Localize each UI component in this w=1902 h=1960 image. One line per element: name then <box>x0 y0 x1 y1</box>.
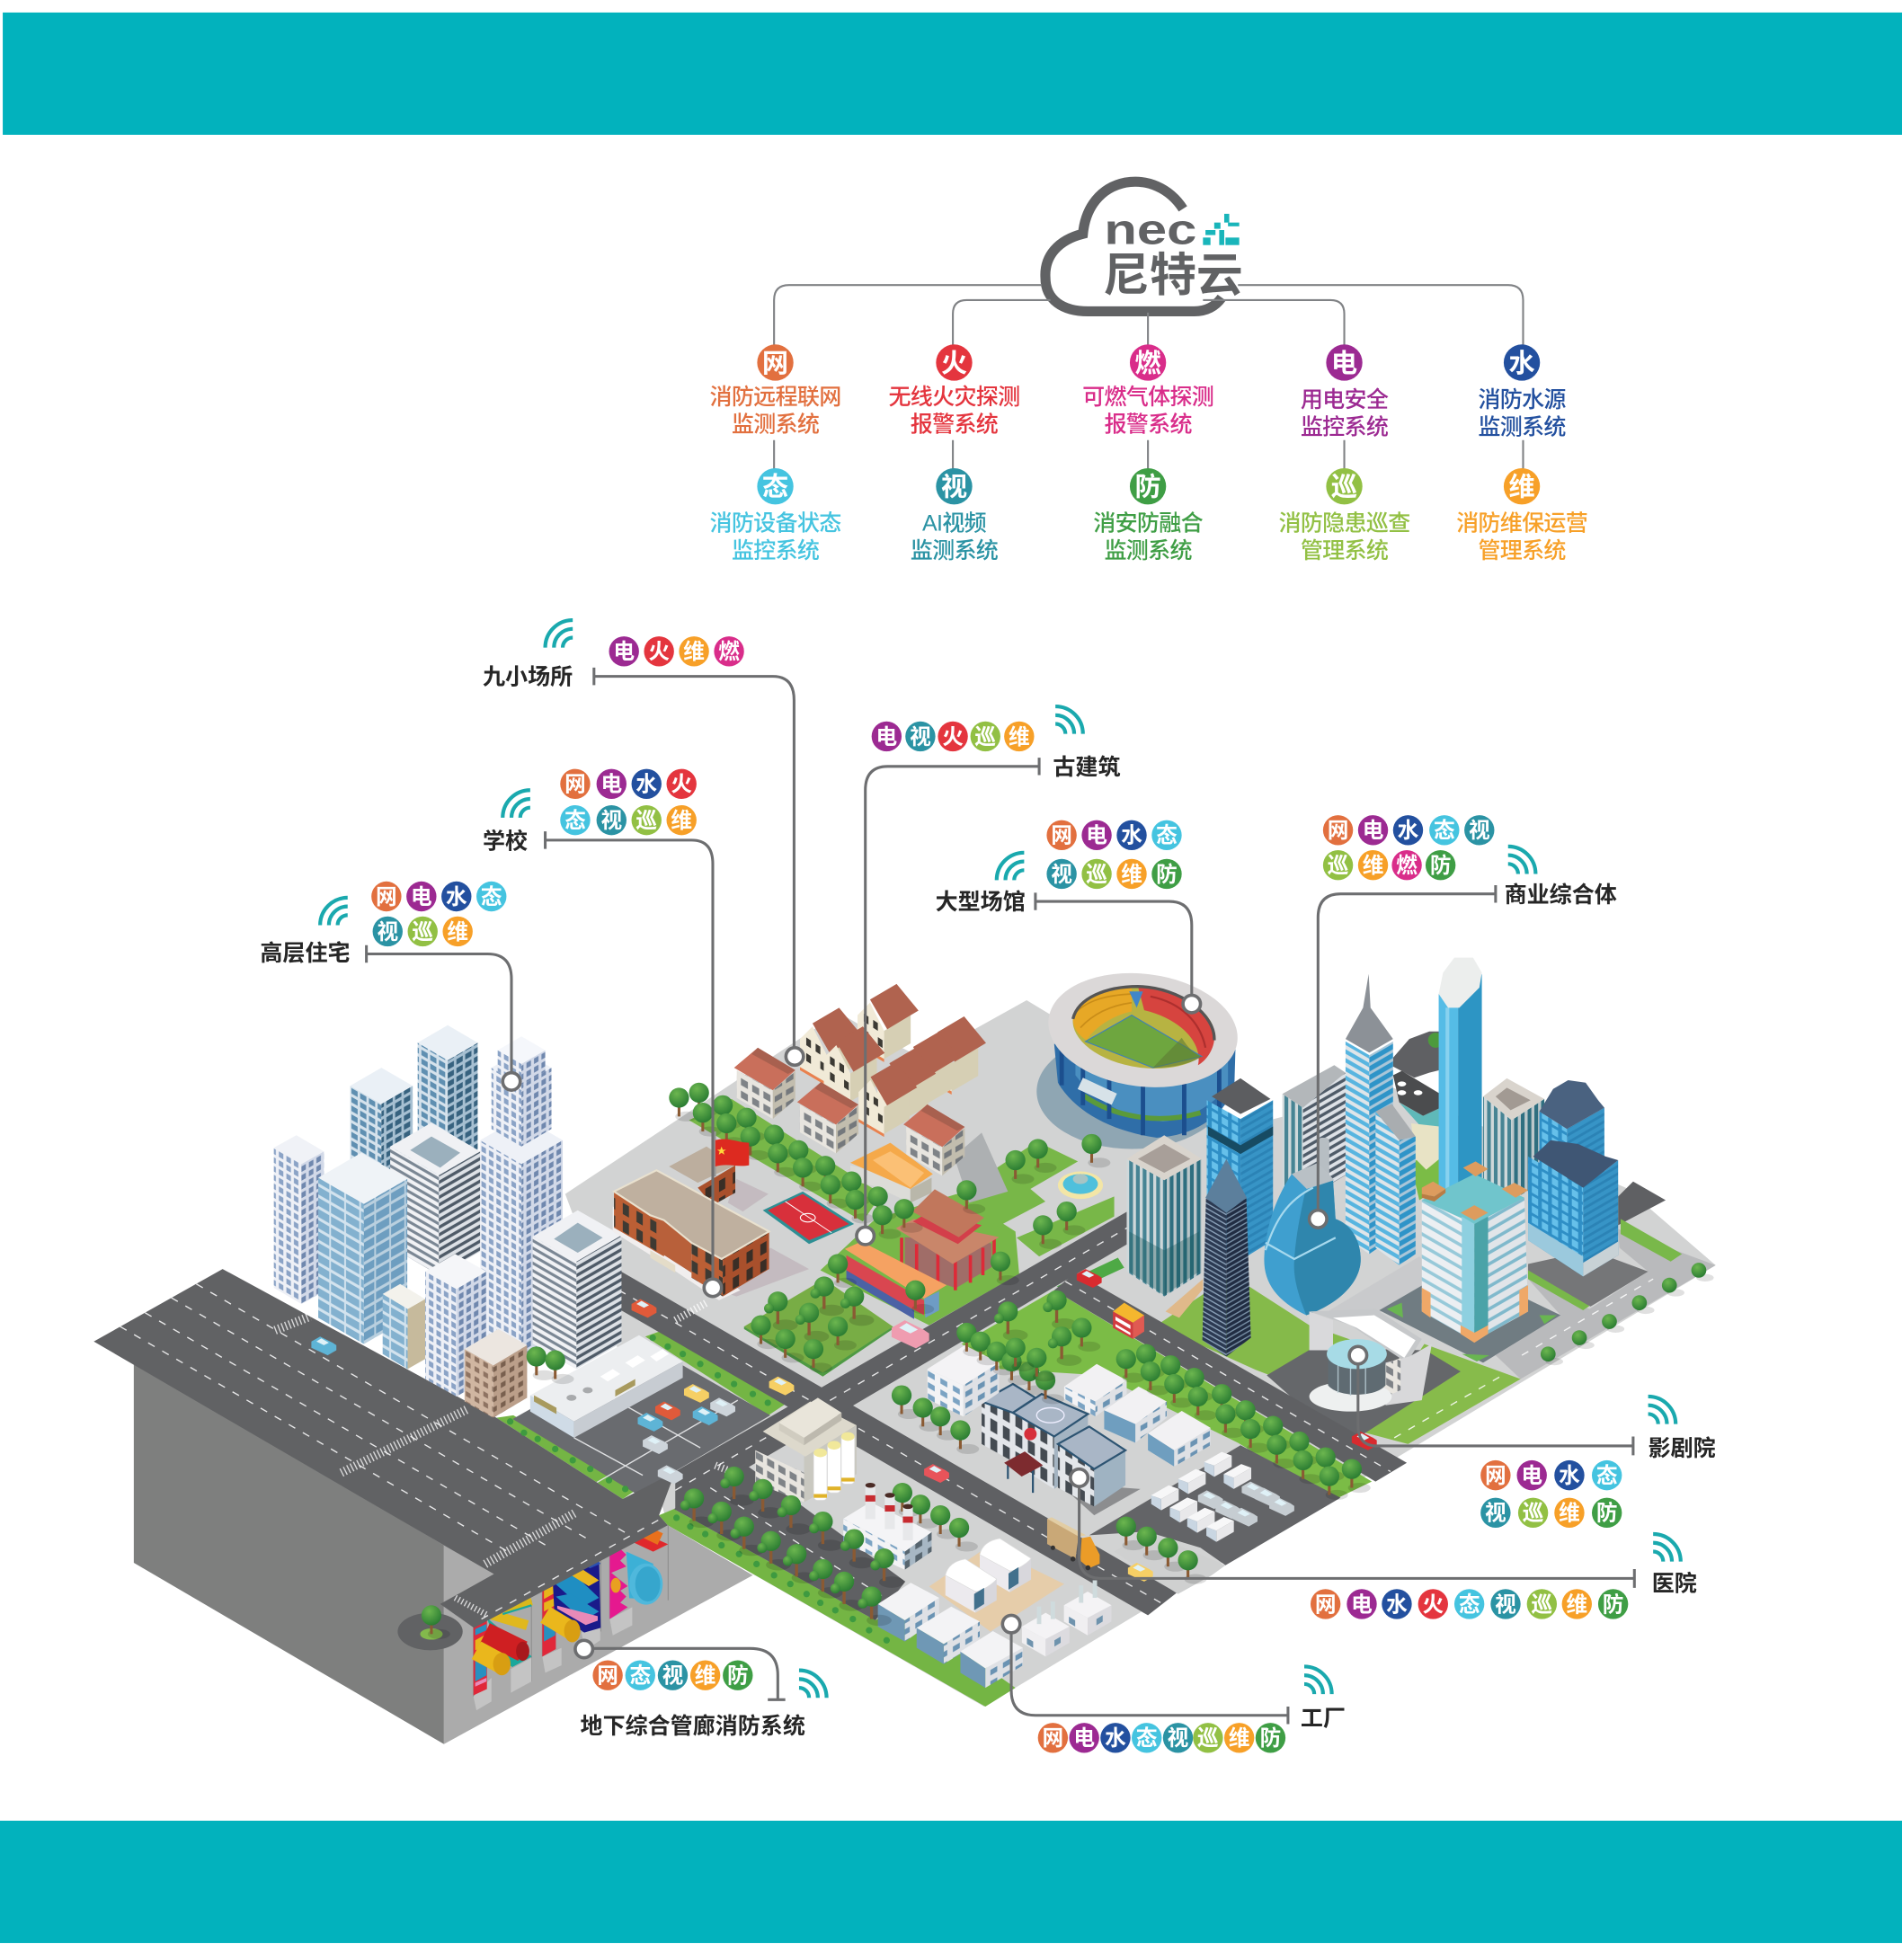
label group: 地下综合管廊消防系统: 态 <box>629 1664 651 1689</box>
orange house <box>850 1143 933 1202</box>
label group: 古建筑: 电 <box>876 725 898 749</box>
label group: 商业综合体: 商业综合体 <box>1505 882 1617 908</box>
hedges <box>507 1335 890 1644</box>
system: 消防远程联网监测系统: 监测系统 <box>732 412 820 438</box>
label group: 影剧院: 网 <box>1485 1465 1506 1488</box>
label group: 医院: 医院 <box>1652 1571 1697 1596</box>
system: 消防远程联网监测系统: 消防远程联网 <box>710 385 841 410</box>
label group: 商业综合体: 态 <box>1434 819 1455 843</box>
system: 消防设备状态监控系统: 监控系统 <box>732 538 820 563</box>
label group: 地下综合管廊消防系统: 维 <box>695 1664 715 1689</box>
label group: 学校 <box>483 769 697 855</box>
system: 消防隐患巡查管理系统: 消防隐患巡查 <box>1279 511 1410 537</box>
label group: 影剧院 <box>1480 1397 1716 1528</box>
label group: 九小场所: 电 <box>613 640 635 664</box>
stadium <box>1036 962 1244 1149</box>
underground utility tunnel block <box>134 1362 752 1744</box>
label group: 影剧院: 巡 <box>1523 1502 1544 1526</box>
system: 消防远程联网监测系统: 网 <box>762 350 788 378</box>
temple buildings <box>845 1189 1000 1319</box>
system: AI视频监测系统: 监测系统 <box>911 538 999 563</box>
label group: 古建筑: 巡 <box>974 725 996 749</box>
connector lines from cloud to systems <box>774 285 1523 469</box>
pipes in bay 1 <box>474 1601 532 1695</box>
system: AI视频监测系统 <box>911 468 999 563</box>
logo: 尼特云 cloud: nec <box>1104 206 1196 253</box>
label group: 地下综合管廊消防系统: 防 <box>727 1664 749 1689</box>
pipes in bay 2 <box>542 1555 600 1656</box>
callout: 地下综合管廊 <box>575 1640 786 1699</box>
label group: 古建筑 <box>872 706 1120 780</box>
system: 消防隐患巡查管理系统: 巡 <box>1331 473 1357 502</box>
label group: 学校: 巡 <box>635 809 657 833</box>
label group: 医院: 态 <box>1459 1592 1480 1617</box>
system: 可燃气体探测报警系统: 燃 <box>1135 349 1161 378</box>
system: 消防设备状态监控系统: 态 <box>762 473 788 502</box>
label group: 高层住宅: 高层住宅 <box>260 940 351 966</box>
system: 消防隐患巡查管理系统 <box>1279 468 1410 563</box>
system: 消防水源监测系统: 监测系统 <box>1478 414 1566 439</box>
hospital <box>982 1384 1125 1506</box>
factory with chimneys <box>843 1483 931 1570</box>
label group: 地下综合管廊消防系统: 视 <box>662 1664 684 1689</box>
label group: 影剧院: 维 <box>1559 1502 1580 1526</box>
label group: 影剧院: 水 <box>1559 1464 1580 1488</box>
system: 用电安全监控系统: 用电安全 <box>1301 387 1389 412</box>
label group: 医院: 水 <box>1386 1592 1408 1617</box>
label group: 商业综合体: 视 <box>1469 819 1490 843</box>
highway deck <box>93 1269 675 1650</box>
label group: 九小场所: 燃 <box>718 640 740 664</box>
label group: 工厂: 巡 <box>1197 1726 1219 1751</box>
label group: 高层住宅: 维 <box>447 920 468 945</box>
label group: 医院: 维 <box>1566 1592 1587 1617</box>
system: 无线火灾探测报警系统: 报警系统 <box>911 412 999 438</box>
system: 无线火灾探测报警系统 <box>888 344 1019 438</box>
logo: 尼特云 cloud: 尼特云 <box>1103 249 1243 301</box>
label group: 古建筑: 火 <box>942 726 964 749</box>
label group: 学校: 学校 <box>483 829 528 855</box>
label group: 医院: 网 <box>1315 1593 1336 1617</box>
label group: 大型场馆: 大型场馆 <box>936 890 1026 915</box>
system: 用电安全监控系统: 电 <box>1331 349 1357 378</box>
label group: 地下综合管廊消防系统: 地下综合管廊消防系统 <box>581 1714 805 1739</box>
label group: 商业综合体: 水 <box>1398 819 1419 843</box>
label group: 大型场馆: 巡 <box>1086 863 1107 887</box>
dark spire tower <box>1203 1159 1251 1356</box>
label group: 工厂: 视 <box>1168 1726 1189 1751</box>
label group: 学校: 水 <box>635 773 657 797</box>
label group: 工厂: 网 <box>1043 1727 1063 1751</box>
pipes in bay 3 <box>609 1528 668 1619</box>
label group: 工厂: 维 <box>1229 1726 1249 1751</box>
callout: 九小场所 <box>594 668 804 1065</box>
school <box>613 1147 769 1300</box>
label group: 大型场馆: 视 <box>1051 863 1072 887</box>
label group: 医院 <box>1311 1534 1697 1619</box>
system: 无线火灾探测报警系统: 无线火灾探测 <box>888 385 1019 410</box>
system: 消防维保运营管理系统: 消防维保运营 <box>1456 511 1587 537</box>
houses <box>734 984 986 1175</box>
label group: 医院: 巡 <box>1532 1592 1553 1617</box>
system: 消安防融合监测系统: 监测系统 <box>1104 538 1192 563</box>
label group: 古建筑: 古建筑 <box>1053 755 1120 780</box>
system: 消防设备状态监控系统: 消防设备状态 <box>710 511 841 537</box>
label group: 工厂: 防 <box>1260 1726 1281 1751</box>
label group: 影剧院: 电 <box>1521 1464 1542 1488</box>
label group: 大型场馆: 防 <box>1156 863 1178 887</box>
label group: 影剧院: 影剧院 <box>1649 1436 1716 1461</box>
top teal banner <box>3 13 1902 135</box>
system: 消防维保运营管理系统: 管理系统 <box>1478 538 1566 563</box>
label group: 高层住宅: 水 <box>446 885 467 909</box>
label group: 商业综合体: 燃 <box>1396 854 1418 878</box>
label group: 古建筑: 视 <box>910 725 931 749</box>
label group: 九小场所 <box>483 620 744 690</box>
bottom teal banner <box>0 1821 1902 1943</box>
label group: 高层住宅: 电 <box>411 885 432 909</box>
label group: 商业综合体: 维 <box>1363 854 1383 878</box>
label group: 影剧院: 防 <box>1596 1502 1618 1526</box>
label group: 工厂: 电 <box>1073 1726 1095 1751</box>
label group: 高层住宅: 网 <box>376 886 397 909</box>
system: 可燃气体探测报警系统: 可燃气体探测 <box>1082 385 1213 410</box>
system: 用电安全监控系统: 监控系统 <box>1301 414 1389 439</box>
white low-rise buildings <box>928 1345 1211 1467</box>
label group: 大型场馆: 网 <box>1051 825 1072 848</box>
opera house <box>1310 1309 1432 1412</box>
system: AI视频监测系统: AI视频 <box>922 511 987 537</box>
trees <box>527 1083 1714 1626</box>
system: 无线火灾探测报警系统: 火 <box>941 350 967 378</box>
label group: 工厂: 水 <box>1105 1726 1126 1751</box>
label group: 学校: 火 <box>671 774 692 797</box>
system: 用电安全监控系统 <box>1301 344 1389 439</box>
system: 可燃气体探测报警系统: 报警系统 <box>1104 412 1192 438</box>
label group: 学校: 维 <box>671 809 692 833</box>
label group: 学校: 态 <box>564 809 586 833</box>
label group: 工厂 <box>1038 1666 1346 1752</box>
callout: 古建筑 <box>857 758 1039 1245</box>
system: 消防远程联网监测系统 <box>710 344 841 438</box>
label group: 影剧院: 态 <box>1596 1464 1618 1488</box>
label group: 医院: 电 <box>1351 1592 1373 1617</box>
system: 消防水源监测系统 <box>1478 344 1566 439</box>
label group: 商业综合体: 防 <box>1430 854 1451 878</box>
label group: 学校: 电 <box>600 773 622 797</box>
label group: 古建筑: 维 <box>1009 725 1030 749</box>
label group: 医院: 视 <box>1495 1592 1516 1617</box>
label group: 大型场馆: 维 <box>1121 863 1142 887</box>
label group: 工厂: 工厂 <box>1301 1707 1346 1732</box>
trees behind chimney factory <box>893 1483 939 1529</box>
flag <box>714 1131 749 1176</box>
callout: 高层住宅 <box>367 945 520 1090</box>
label group: 商业综合体: 电 <box>1363 819 1384 843</box>
system: 消防设备状态监控系统 <box>710 468 841 563</box>
warehouses <box>878 1539 1111 1688</box>
high-rise residential cluster <box>274 1025 621 1418</box>
label group: 大型场馆: 态 <box>1156 824 1178 848</box>
callout: 商业综合体 <box>1310 885 1496 1228</box>
office tower with teal stripes <box>1126 1135 1202 1297</box>
callout: 医院 <box>1071 1469 1634 1588</box>
callout: 工厂 <box>1002 1615 1288 1724</box>
system: 消防水源监测系统: 消防水源 <box>1478 387 1566 412</box>
callout: 大型场馆 <box>1035 892 1201 1013</box>
label group: 九小场所: 维 <box>683 640 705 664</box>
system: 消安防融合监测系统: 防 <box>1135 473 1161 502</box>
system: AI视频监测系统: 视 <box>941 473 967 502</box>
label group: 九小场所: 火 <box>648 641 670 664</box>
label group: 大型场馆: 电 <box>1086 824 1107 848</box>
label group: 大型场馆: 水 <box>1121 824 1142 848</box>
parked delivery vans and cars <box>1151 1452 1294 1542</box>
label group: 大型场馆 <box>936 820 1182 915</box>
system: 可燃气体探测报警系统 <box>1082 344 1213 438</box>
label group: 医院: 火 <box>1422 1593 1444 1617</box>
label group: 商业综合体 <box>1323 815 1617 908</box>
label group: 高层住宅: 态 <box>481 885 502 909</box>
label group: 学校: 视 <box>600 809 622 833</box>
label group: 地下综合管廊消防系统: 网 <box>597 1665 618 1689</box>
label group: 医院: 防 <box>1603 1592 1623 1617</box>
label group: 高层住宅: 视 <box>377 920 398 945</box>
label group: 商业综合体: 网 <box>1328 820 1348 843</box>
label group: 高层住宅: 巡 <box>412 920 433 945</box>
system: 消安防融合监测系统: 消安防融合 <box>1093 511 1204 537</box>
delivery truck <box>1047 1517 1099 1570</box>
system: 消防水源监测系统: 水 <box>1508 349 1535 378</box>
system: 消防维保运营管理系统 <box>1456 468 1587 563</box>
logo: 尼特云 cloud <box>1045 182 1243 311</box>
callout: 影剧院 <box>1349 1346 1633 1455</box>
label group: 工厂: 态 <box>1136 1726 1158 1751</box>
teardrop tower <box>1264 1138 1361 1316</box>
callout: 学校 <box>546 831 722 1297</box>
label group: 地下综合管廊消防系统 <box>581 1661 827 1739</box>
system: 消防维保运营管理系统: 维 <box>1508 473 1535 502</box>
label group: 商业综合体: 巡 <box>1328 854 1349 878</box>
hotel tower with teal roof <box>1422 1161 1528 1343</box>
label group: 九小场所: 九小场所 <box>483 665 573 690</box>
isometric city ground <box>496 1000 1716 1707</box>
back towers: blue, spire, teal <box>1206 958 1618 1276</box>
factory with silos <box>755 1397 857 1503</box>
label group: 学校: 网 <box>564 774 586 797</box>
vehicles on the roads <box>311 1269 1377 1582</box>
label group: 高层住宅 <box>260 882 506 966</box>
market building <box>530 1335 683 1438</box>
label group: 影剧院: 视 <box>1485 1502 1506 1526</box>
system: 消安防融合监测系统 <box>1093 468 1204 563</box>
system: 消防隐患巡查管理系统: 管理系统 <box>1301 538 1389 563</box>
